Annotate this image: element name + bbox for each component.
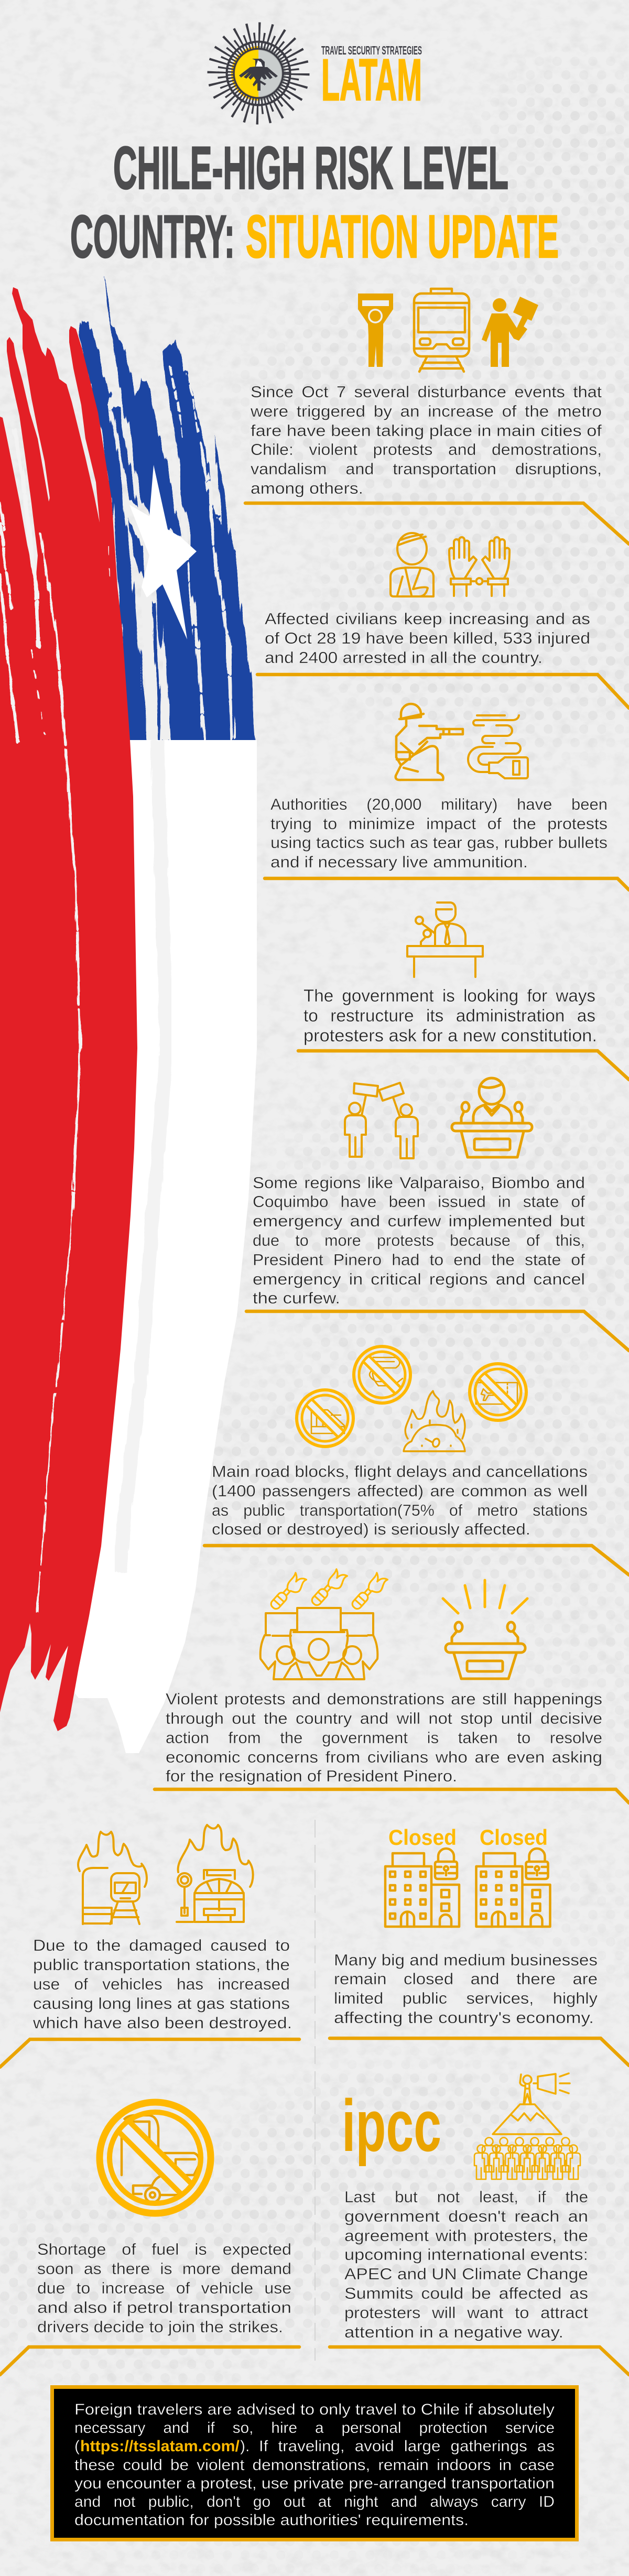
text: closed businesses: remain closed and there are <box>334 1970 598 1988</box>
logo <box>217 32 422 114</box>
text: closed businesses: affecting the country's economy. <box>334 2008 594 2027</box>
icons: protest and metro <box>358 289 538 372</box>
text: state of emergency <box>253 1173 585 1307</box>
icon: person with hammer <box>482 297 538 367</box>
logo tagline: TRAVEL SECURITY STRATEGIES <box>321 44 422 57</box>
text: government restructure <box>303 986 597 1045</box>
flag red band <box>0 287 137 1731</box>
text: upcoming summits: upcoming international events: <box>344 2245 588 2264</box>
text: disturbance events: Since Oct 7 several disturbance events that <box>251 383 602 401</box>
text: affected civilians: and 2400 arrested in all the country. <box>265 648 543 667</box>
text: disturbance events <box>250 383 602 497</box>
Chilean flag brush stroke <box>0 277 257 1753</box>
label: closed: Closed <box>388 1825 457 1850</box>
text: upcoming summits: attention in a negative way. <box>344 2323 563 2341</box>
text: violent protests: for the resignation of President Pinero. <box>166 1767 457 1785</box>
text: closed businesses <box>334 1951 598 2027</box>
icon: three protesters with signs <box>261 1608 377 1679</box>
icons: international summits <box>342 2073 580 2179</box>
text: state of emergency: President Pinero had to end the state of <box>253 1251 585 1269</box>
text: upcoming summits <box>344 2188 588 2341</box>
text: road blocks: as public transportation(75% of metro stations <box>212 1501 588 1519</box>
icon: no road <box>354 1346 410 1403</box>
panel: travel advice: If traveling, avoid large gatherings as <box>259 2438 555 2455</box>
text: state of emergency: emergency in critical regions and cancel <box>253 1270 585 1288</box>
icon: burning rubble <box>404 1391 465 1451</box>
link text: https://tsslatam.com/ <box>80 2438 240 2455</box>
text: state of emergency: Some regions like Valparaiso, Biombo and <box>253 1173 585 1192</box>
text: violent protests: action from the government is taken to resolve <box>166 1729 602 1747</box>
icons: military and tear gas <box>396 704 528 780</box>
text: damaged transportation: Due to the damaged caused to <box>33 1936 290 1954</box>
text: affected civilians: Affected civilians keep increasing and as <box>265 610 590 628</box>
icon: handcuffed hands <box>449 537 509 596</box>
icon: no flights <box>470 1364 526 1420</box>
logo emblem <box>217 32 300 114</box>
text: authorities: and if necessary live ammunition. <box>270 853 528 871</box>
icon: injured civilian <box>391 533 433 596</box>
icon: no fuel truck <box>100 2102 211 2213</box>
text: government restructure: to restructure its administration as <box>303 1006 595 1025</box>
icon: leader at podium <box>452 1078 532 1157</box>
text: government restructure: The government is looking for ways <box>303 986 595 1005</box>
text: fuel shortage: soon as there is more demand <box>37 2259 291 2278</box>
text: disturbance events: Chile: violent protests and demostrations, <box>251 440 602 459</box>
text: damaged transportation: use of vehicles has increased <box>33 1975 290 1993</box>
text: road blocks <box>212 1462 588 1538</box>
text: road blocks: Main road blocks, flight delays and cancellations <box>212 1462 588 1481</box>
text: disturbance events: among others. <box>251 479 363 497</box>
panel: travel advice: documentation for possible authorities' requirements. <box>74 2512 469 2529</box>
text: damaged transportation: causing long lines at gas stations <box>33 1994 290 2013</box>
icon: protester holding sign <box>358 294 393 367</box>
icons: protesters and podium <box>345 1078 532 1158</box>
text: state of emergency: the curfew. <box>253 1289 340 1307</box>
text: fuel shortage: and also if petrol transportation <box>37 2298 291 2317</box>
text: disturbance events: fare have been taking place in main cities of <box>251 421 602 440</box>
text: road blocks: (1400 passengers affected) are common as well <box>212 1482 588 1500</box>
icon: tear gas canister <box>468 715 528 778</box>
icon: government speaker at desk <box>407 903 483 977</box>
text: fuel shortage: drivers decide to join the strikes. <box>37 2318 283 2336</box>
text: upcoming summits: agreement with protesters, the <box>344 2226 588 2245</box>
text: damaged transportation: which have also been destroyed. <box>32 2014 292 2032</box>
text: state of emergency: due to more protests because of this, <box>253 1231 585 1249</box>
logo: ipcc: ipcc <box>342 2084 441 2167</box>
text: closed businesses: Many big and medium businesses <box>334 1951 598 1969</box>
title <box>70 135 559 270</box>
text: fuel shortage: due to increase of vehicle use <box>37 2279 291 2297</box>
text: upcoming summits: APEC and UN Climate Change <box>344 2265 588 2283</box>
panel: travel advice: ( <box>74 2438 80 2455</box>
text: affected civilians <box>265 610 590 667</box>
text: authorities: Authorities (20,000 military) have been <box>270 795 608 813</box>
icon: podium with rays <box>443 1580 527 1679</box>
icon: closed building <box>385 1849 459 1927</box>
title: COUNTRY: <box>70 203 235 270</box>
text: government restructure: protesters ask for a new constitution. <box>303 1026 597 1045</box>
text: state of emergency: Coquimbo have been issued in state of <box>253 1192 585 1211</box>
flag star <box>129 465 197 639</box>
logo wordmark: LATAM <box>321 47 422 113</box>
icons: transport disruption <box>297 1346 526 1451</box>
icon: closed building <box>476 1849 550 1927</box>
text: violent protests: economic concerns from civilians who are even asking <box>166 1748 602 1766</box>
icon: burning bus stop <box>177 1825 253 1922</box>
text: upcoming summits: Summits could be affected as <box>344 2284 588 2302</box>
text: closed businesses: limited public services, highly <box>334 1989 598 2007</box>
icon: metro train <box>414 289 469 372</box>
icon: kneeling soldier <box>396 704 463 780</box>
text: damaged transportation: public transportation stations, the <box>33 1955 290 1974</box>
panel: travel advice: you encounter a protest, use private pre-arranged transportation <box>74 2475 555 2492</box>
panel: travel advice: ). <box>240 2438 250 2455</box>
text: authorities <box>270 795 608 871</box>
text: upcoming summits: government doesn't reach an <box>344 2207 588 2225</box>
icon: two protesters with signs <box>345 1083 418 1158</box>
icons: violent protests <box>261 1568 527 1679</box>
icon: burning metro station <box>78 1832 147 1924</box>
text: disturbance events: were triggered by an increase of the metro <box>250 402 602 420</box>
panel: travel advice: these could be violent demonstrations, remain indoors in case <box>74 2457 555 2474</box>
icon: molotov cocktails <box>268 1568 389 1613</box>
text: upcoming summits: Last but not least, if the <box>344 2188 588 2206</box>
text: violent protests <box>166 1690 602 1785</box>
panel: travel advice: and not public, don't go out at night and always carry ID <box>74 2493 555 2510</box>
text: authorities: trying to minimize impact of the protests <box>270 814 608 833</box>
flag red distress streaks <box>0 430 110 1612</box>
panel: travel advice <box>52 2387 577 2540</box>
text: fuel shortage <box>37 2240 291 2336</box>
text: violent protests: through out the country and will not stop until decisive <box>166 1709 602 1727</box>
text: upcoming summits: protesters will want to attract <box>344 2303 588 2322</box>
icon: crowd with megaphone on mountain <box>474 2073 580 2179</box>
text: road blocks: closed or destroyed) is seriously affected. <box>212 1520 530 1538</box>
label: closed: Closed <box>480 1825 548 1850</box>
panel: travel advice: necessary and if so, hire a personal protection service <box>74 2419 555 2437</box>
flag blue field <box>79 277 257 755</box>
text: violent protests: Violent protests and demonstrations are still happenings <box>166 1690 602 1708</box>
text: affected civilians: of Oct 28 19 have been killed, 533 injured <box>265 629 590 647</box>
flag white band <box>63 740 257 1753</box>
text: authorities: using tactics such as tear gas, rubber bullets <box>270 833 608 852</box>
icons: closed businesses <box>385 1825 550 1927</box>
text: disturbance events: vandalism and transportation disruptions, <box>251 460 602 478</box>
text: damaged transportation <box>32 1936 292 2032</box>
icon: no metro <box>297 1390 353 1447</box>
icons: injured and arrested <box>391 533 509 596</box>
text: state of emergency: emergency and curfew implemented but <box>253 1212 585 1230</box>
panel: travel advice: Foreign travelers are advised to only travel to Chile if absolutely <box>74 2401 555 2418</box>
text: fuel shortage: Shortage of fuel is expected <box>37 2240 291 2258</box>
icons: burning stations <box>78 1825 253 1924</box>
